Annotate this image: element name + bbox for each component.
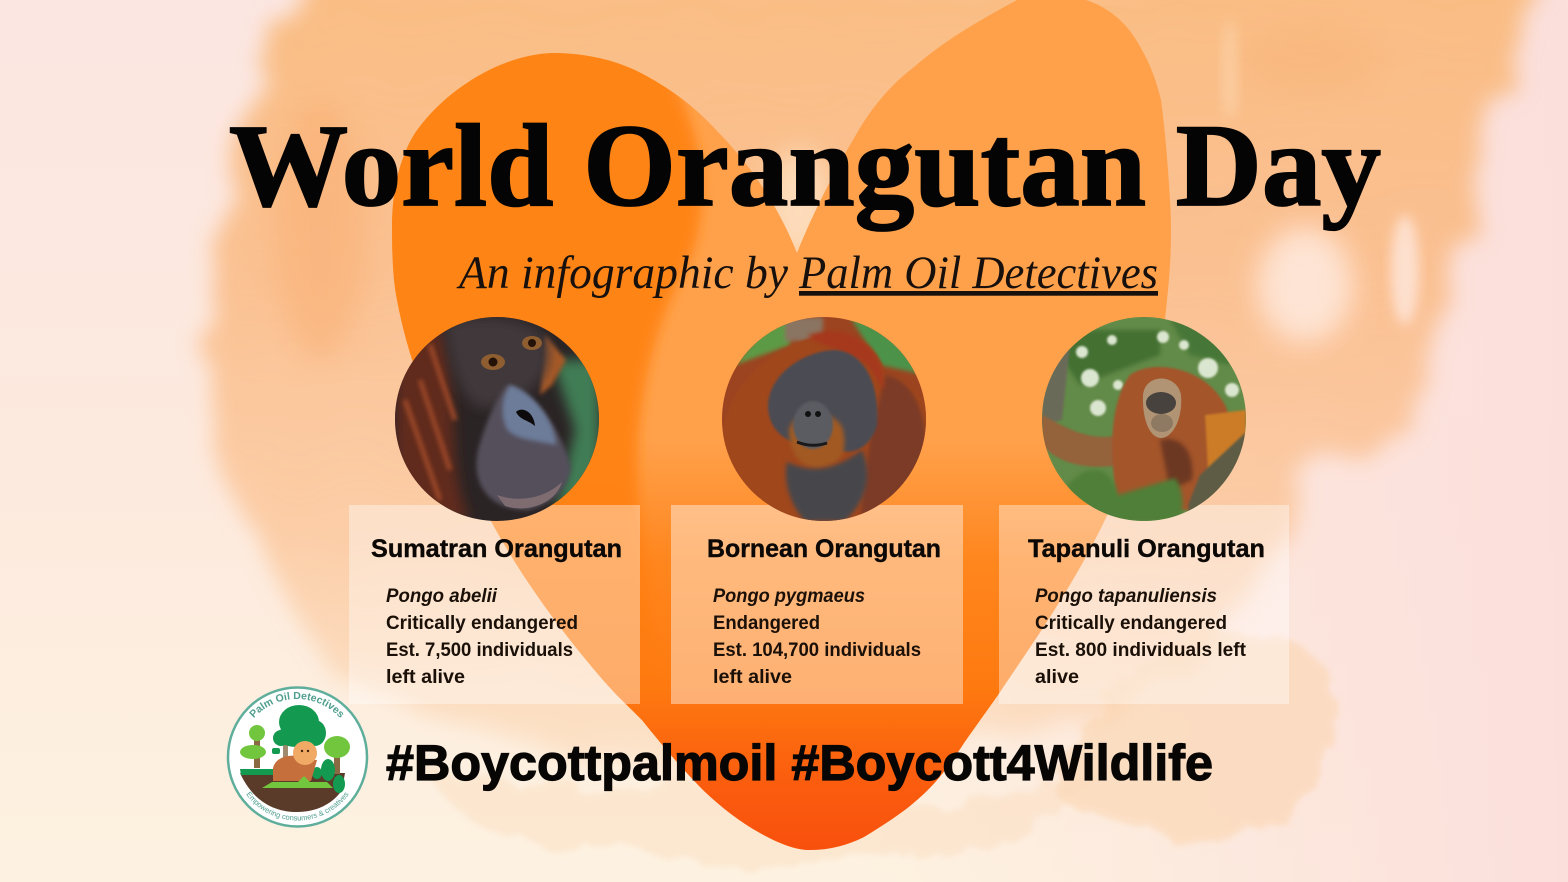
subtitle (456, 247, 1158, 299)
species facts (713, 585, 921, 688)
species facts: Pongo tapanuliensis (1035, 585, 1217, 607)
species facts: Critically endangered (1035, 612, 1227, 634)
panel: Sumatran Orangutan (349, 505, 640, 704)
heading: Bornean Orangutan (707, 535, 941, 563)
heading: Tapanuli Orangutan (1028, 535, 1265, 563)
photo: Bornean orangutan (722, 317, 930, 521)
species facts: Endangered (713, 612, 820, 634)
panel: Bornean Orangutan (671, 505, 963, 704)
species facts (386, 585, 578, 688)
lower right wash (1057, 629, 1337, 840)
logo text: Palm Oil Detectives (249, 692, 344, 718)
heart shape (370, 0, 1190, 860)
species facts: Est. 7,500 individuals (386, 639, 573, 661)
species facts (1035, 585, 1246, 688)
link: Palm Oil Detectives: Palm Oil Detectives (798, 247, 1158, 299)
left lobe darker tone (392, 53, 709, 746)
species facts: Pongo pygmaeus (713, 585, 865, 607)
species facts: Pongo abelii (386, 585, 498, 607)
lower centre wash (420, 760, 1100, 868)
photo: Tapanuli orangutan (1042, 317, 1246, 521)
logo text: Empowering consumers & creatives (246, 792, 348, 820)
title: World Orangutan Day (229, 100, 1381, 231)
logo orangutan (273, 741, 317, 783)
species facts: left alive (386, 666, 465, 688)
heading: Sumatran Orangutan (371, 535, 622, 563)
species facts: alive (1035, 666, 1079, 688)
species facts: Critically endangered (386, 612, 578, 634)
logo text (246, 692, 348, 820)
watercolor wash (210, 0, 1530, 770)
subtitle: An infographic by (456, 247, 788, 299)
species facts: Est. 800 individuals left (1035, 639, 1246, 661)
panel: Tapanuli Orangutan (999, 505, 1289, 704)
darker wash blooms (275, 100, 365, 360)
pale wash gaps (766, 150, 830, 260)
heart base gradient (492, 462, 1108, 850)
logo ground (240, 773, 345, 812)
logo: Palm Oil Detectives badge (226, 686, 368, 828)
species facts: Est. 104,700 individuals (713, 639, 921, 661)
hashtags: #Boycottpalmoil #Boycott4Wildlife (386, 735, 1213, 791)
species facts: left alive (713, 666, 792, 688)
photo: Sumatran orangutan (395, 317, 600, 521)
logo trees (240, 705, 350, 793)
